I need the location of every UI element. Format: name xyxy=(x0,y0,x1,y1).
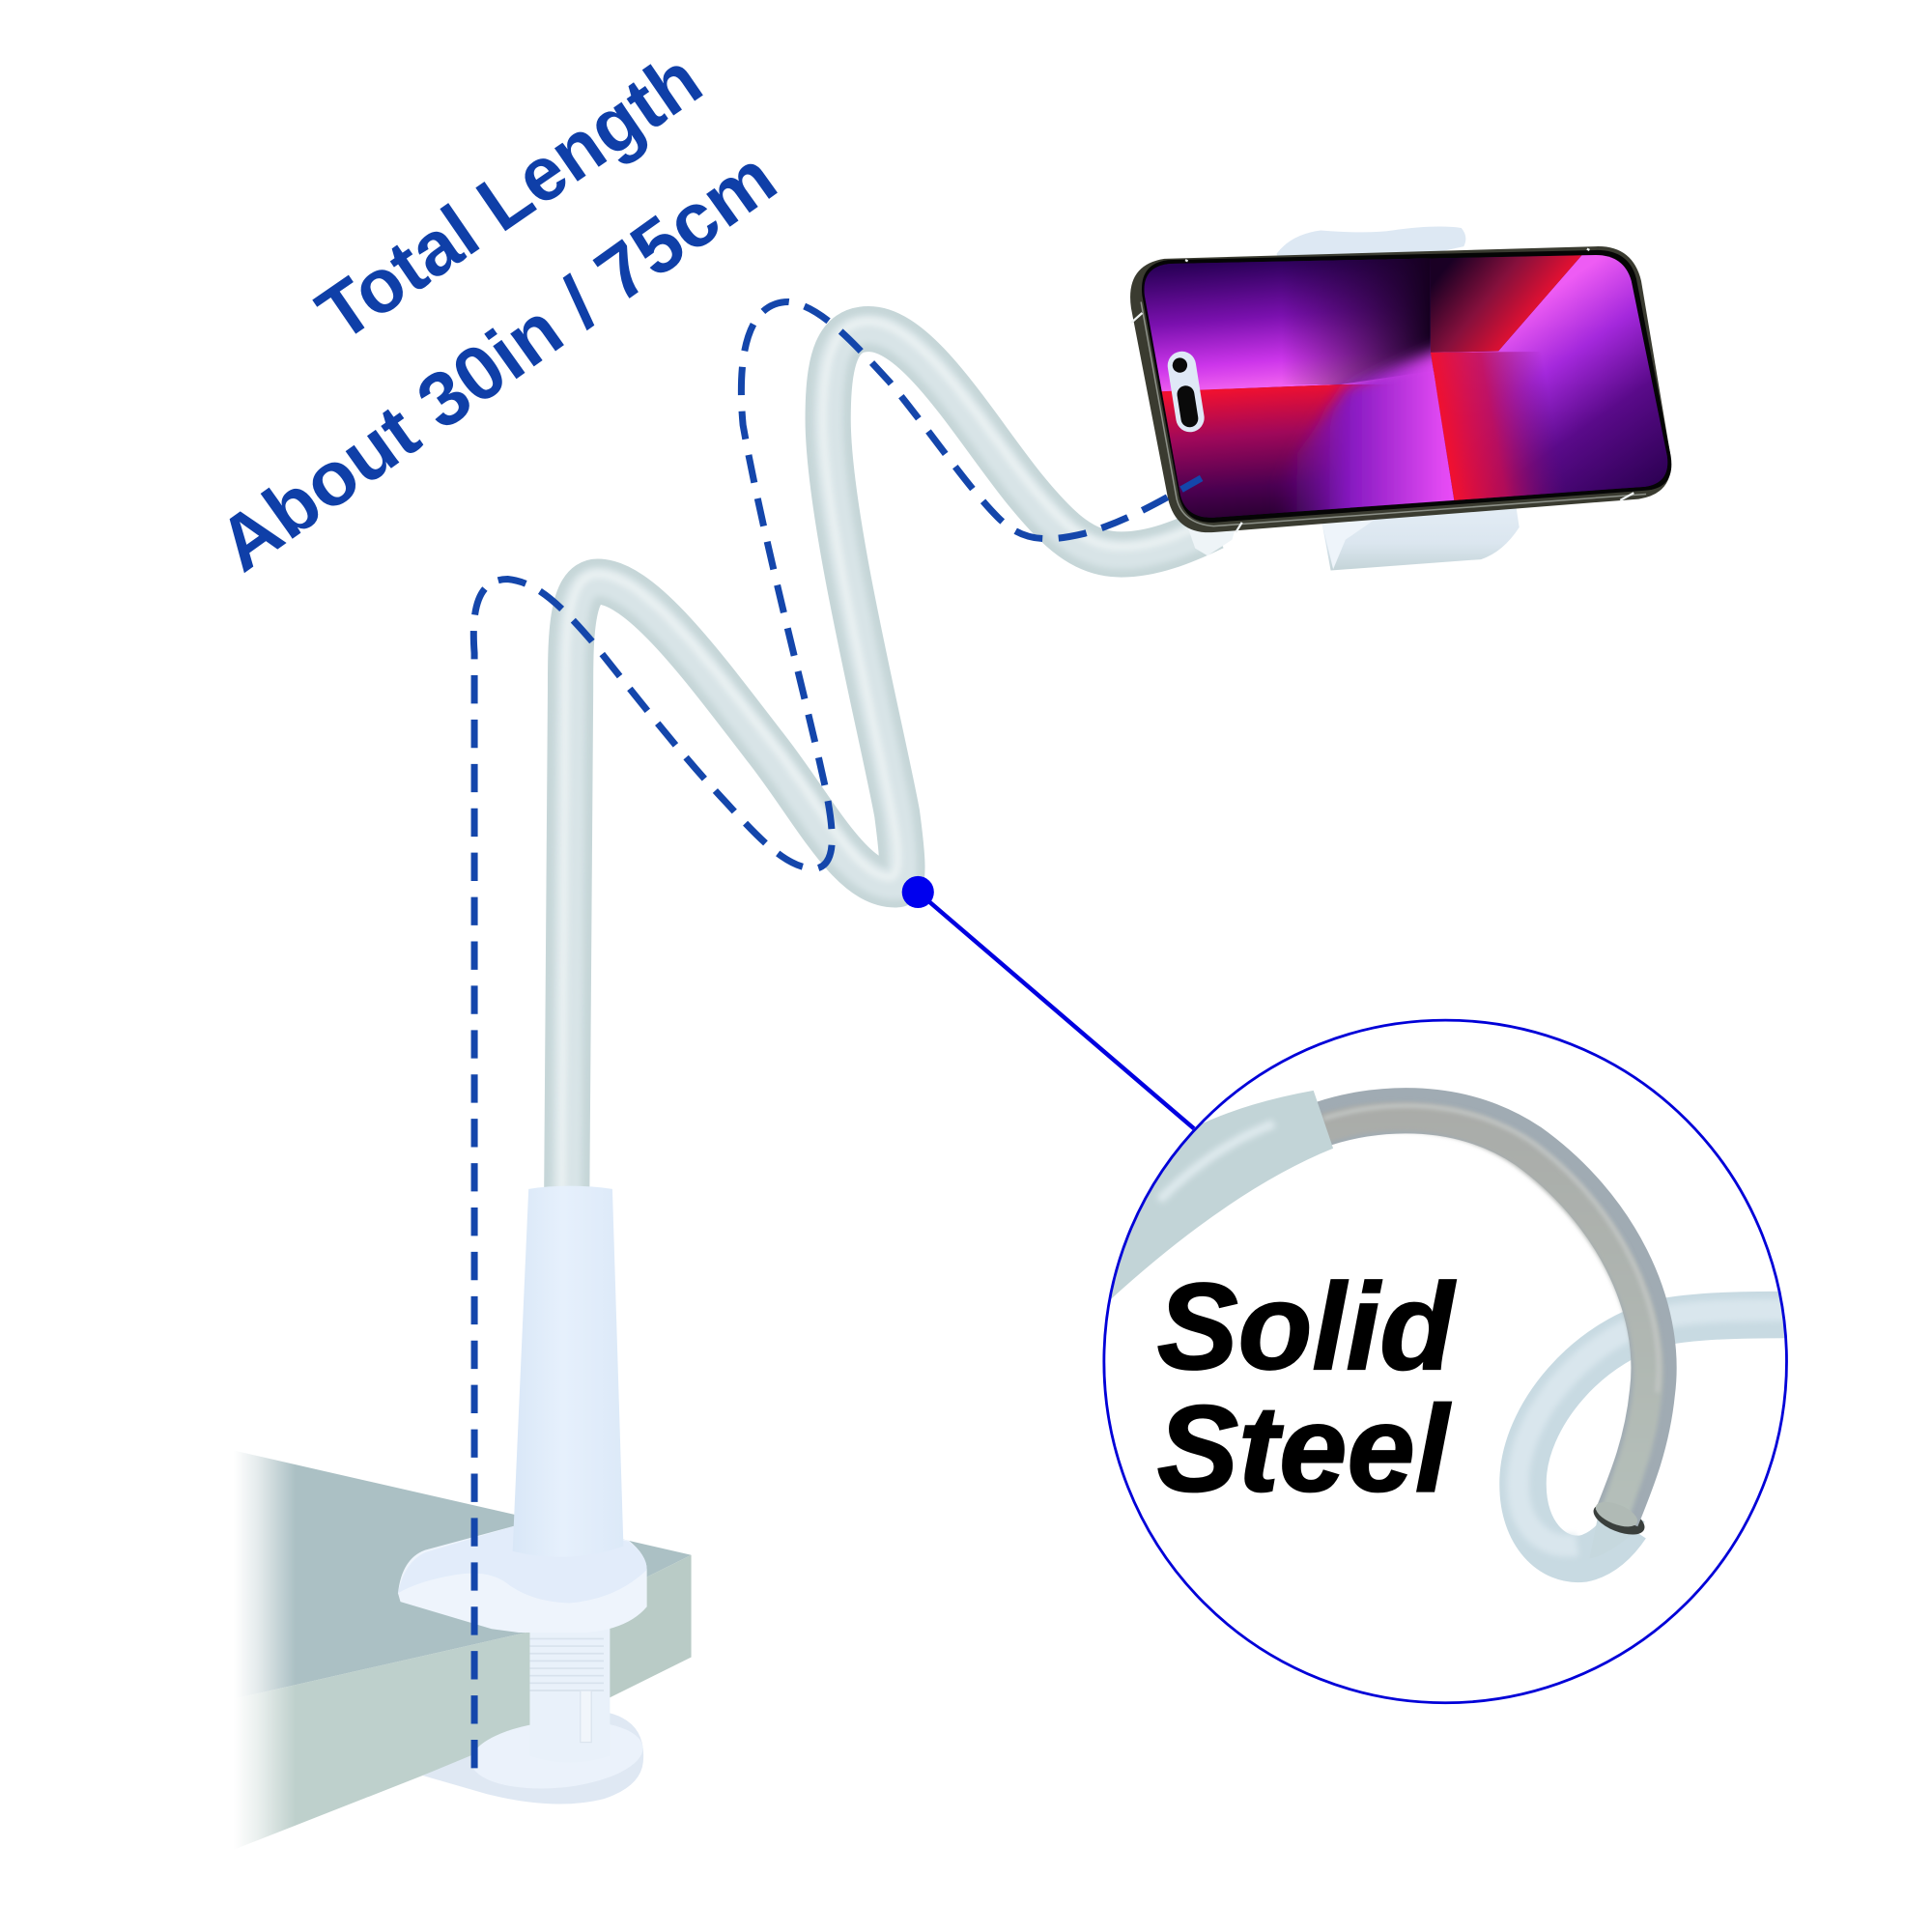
phone connector xyxy=(1188,518,1238,555)
clamp post xyxy=(513,1186,623,1557)
detail inset: solid steel xyxy=(1084,1020,1793,1703)
gooseneck arm xyxy=(562,322,1213,1195)
dynamic island xyxy=(1166,350,1207,434)
plastic sleeve upper xyxy=(1111,1091,1333,1298)
phone bezel xyxy=(1142,250,1671,523)
label: steel: Steel xyxy=(1157,1380,1452,1518)
top clamp plate xyxy=(398,1525,647,1633)
antenna marks xyxy=(1131,249,1634,532)
white sleeve loop xyxy=(1518,1310,1793,1559)
bottom clamp disc xyxy=(423,1713,643,1804)
callout leader line xyxy=(918,892,1194,1128)
frame highlights xyxy=(1141,301,1646,526)
total length dashed guide xyxy=(473,301,1202,1768)
steel end xyxy=(1596,1503,1637,1526)
heading: total length: Total Length xyxy=(302,35,716,357)
top phone grip xyxy=(1276,227,1465,265)
threaded screw xyxy=(529,1627,610,1763)
table with clamp area xyxy=(210,1430,692,1873)
steel core xyxy=(1323,1106,1659,1518)
sleeve opening xyxy=(1594,1507,1644,1534)
sleeve highlight xyxy=(1159,1123,1274,1200)
clamp xyxy=(398,1525,647,1804)
inset circle border xyxy=(1104,1020,1786,1703)
bottom phone grip xyxy=(1322,502,1520,571)
phone xyxy=(1130,246,1688,542)
phone body xyxy=(1130,246,1671,532)
callout marker dot xyxy=(902,876,934,908)
label: solid: Solid xyxy=(1157,1259,1457,1396)
phone wallpaper xyxy=(1144,255,1667,518)
heading: about 30in / 75cm: About 30in / 75cm xyxy=(202,133,791,587)
infographic canvas xyxy=(230,64,1788,1845)
disc upper face xyxy=(469,1714,645,1795)
